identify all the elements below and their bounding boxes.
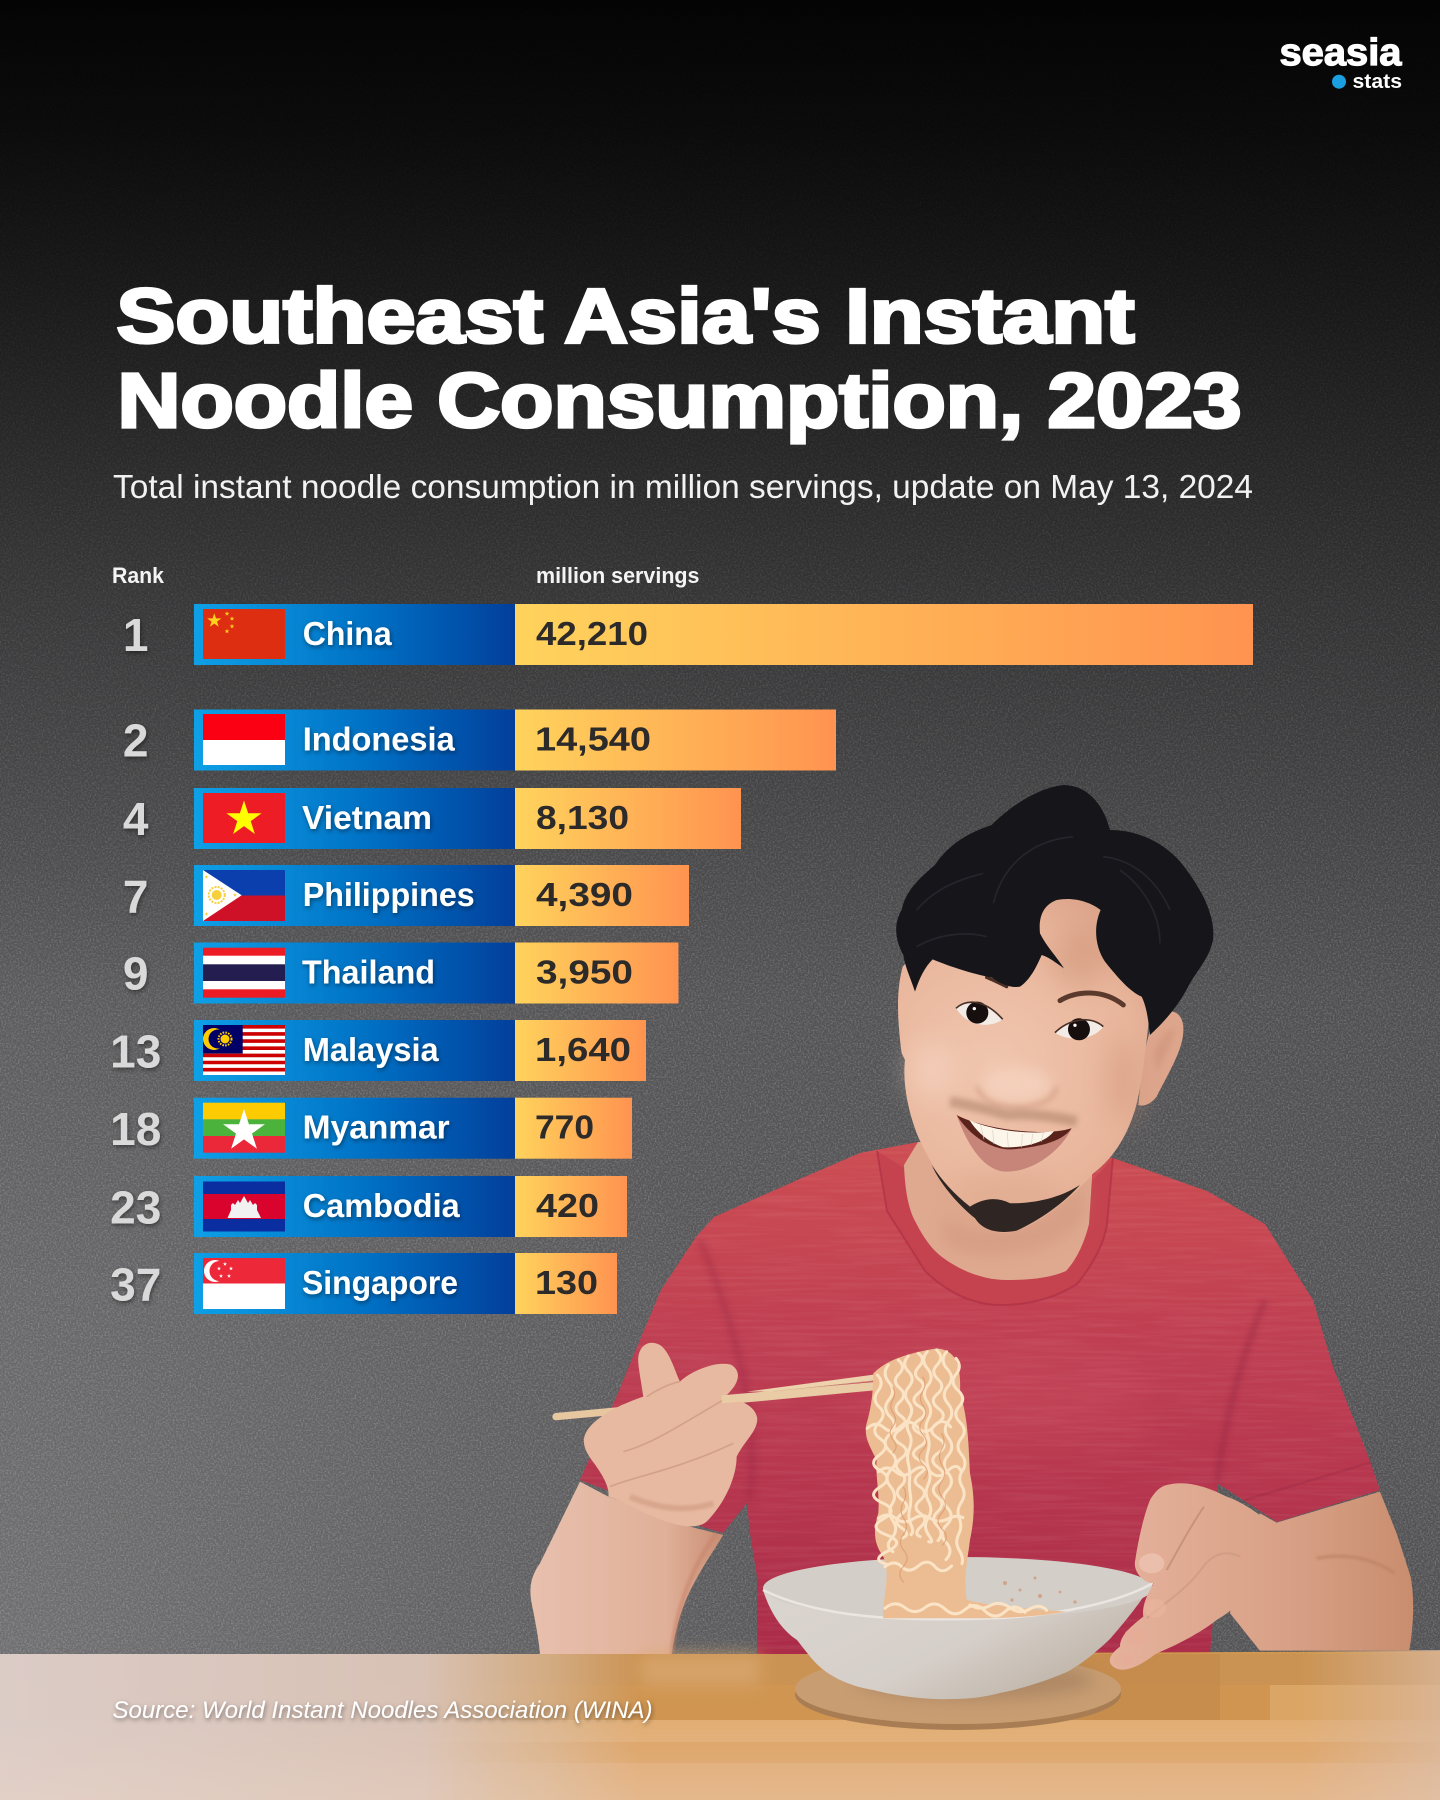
source note: Source: World Instant Noodles Association (WINA) (112, 1697, 652, 1724)
cork coaster (795, 1654, 1121, 1730)
hair highlights (917, 837, 1170, 947)
arm (1230, 1492, 1413, 1651)
bowl inside (763, 1557, 1153, 1619)
bar row: Singapore, rank 37, 130: 37 (110, 1258, 161, 1310)
flag: Malaysia (203, 1025, 285, 1075)
his right arm and hand holding chopsticks (530, 1343, 878, 1654)
hand (1110, 1483, 1300, 1670)
bar row: Singapore, rank 37, 130: 130 (535, 1264, 598, 1301)
logo: seasia stats: seasia (1280, 32, 1402, 74)
flag: Indonesia (203, 714, 285, 765)
bar row: Philippines, rank 7, 4,390: Philippines (303, 876, 475, 913)
bar row: Myanmar, rank 18, 770: 770 (535, 1109, 594, 1146)
bar row: Singapore, rank 37, 130: Singapore (302, 1264, 458, 1301)
photo: man eating noodles (530, 785, 1390, 1660)
bar row: Vietnam, rank 4, 8,130 (123, 788, 741, 849)
table (0, 1650, 1440, 1800)
bar row: Malaysia, rank 13, 1,640: 13 (110, 1026, 161, 1078)
mouth (957, 1115, 1072, 1172)
chopsticks (722, 1386, 875, 1399)
bar row: Philippines, rank 7, 4,390: 7 (123, 870, 148, 922)
bar row: Thailand, rank 9, 3,950 (123, 942, 678, 1004)
bar row: Thailand, rank 9, 3,950: 9 (123, 948, 148, 1000)
bar row: Indonesia, rank 2, 14,540: Indonesia (303, 720, 455, 758)
bar row: Cambodia, rank 23, 420: Cambodia (303, 1187, 460, 1224)
flag: Myanmar (203, 1103, 285, 1153)
bowl body (763, 1583, 1153, 1699)
teeth gaps (981, 1125, 1043, 1147)
bar row: Malaysia, rank 13, 1,640: Malaysia (303, 1031, 439, 1068)
eyes (956, 1002, 1003, 1025)
noodles lifted by chopsticks (866, 1348, 1067, 1618)
bar row: Myanmar, rank 18, 770: 18 (110, 1103, 161, 1155)
bar row: Cambodia, rank 23, 420 (110, 1176, 627, 1237)
head (896, 785, 1213, 1233)
upper arm and forearm (530, 1482, 723, 1654)
bar row: China, rank 1, 42,210 (123, 604, 1253, 665)
bar row: China, rank 1, 42,210: 1 (123, 609, 148, 661)
right ear (1138, 1011, 1183, 1106)
flag: Singapore (203, 1258, 285, 1309)
flag: Philippines (203, 870, 285, 921)
flag: Cambodia (203, 1182, 285, 1232)
bar row: Thailand, rank 9, 3,950: 3,950 (536, 954, 633, 990)
bar row: Thailand, rank 9, 3,950: Thailand (302, 954, 435, 990)
eyebrows (1060, 993, 1123, 1005)
bar row: Vietnam, rank 4, 8,130: 8,130 (536, 799, 629, 836)
column header: million servings: million servings (536, 563, 700, 588)
bar row: Vietnam, rank 4, 8,130: 4 (123, 793, 149, 845)
speckles of sauce (1003, 1576, 1077, 1604)
bar row: Philippines, rank 7, 4,390: 4,390 (536, 876, 633, 913)
shirt folds (1217, 1300, 1265, 1483)
cheek highlights (908, 1040, 955, 1100)
title: Noodle Consumption, 2023 (118, 358, 1242, 444)
bar row: Indonesia, rank 2, 14,540: 14,540 (535, 720, 651, 758)
moustache (950, 1102, 1077, 1122)
subtitle: Total instant noodle consumption in million servings, update on May 13, 2024 (113, 468, 1253, 505)
hair (896, 785, 1213, 1035)
nose shadow (977, 1087, 1057, 1107)
logo: seasia stats: stats (1352, 71, 1402, 93)
title (116, 274, 1242, 444)
title: Southeast Asia's Instant (116, 274, 1134, 360)
goatee (932, 1165, 1080, 1232)
bar row: Myanmar, rank 18, 770: Myanmar (303, 1109, 450, 1146)
face (898, 887, 1153, 1233)
bar row: Singapore, rank 37, 130 (110, 1253, 617, 1314)
hand (584, 1343, 757, 1526)
shirt (580, 1142, 1380, 1654)
bar row: Myanmar, rank 18, 770 (110, 1098, 632, 1159)
collar (877, 1151, 1113, 1305)
flag: China (203, 609, 285, 659)
bar row: Cambodia, rank 23, 420: 23 (110, 1182, 161, 1234)
logo: seasia stats (1280, 32, 1402, 93)
bar row: Malaysia, rank 13, 1,640: 1,640 (535, 1031, 631, 1068)
flag: Vietnam (203, 793, 285, 843)
flag: Thailand (203, 948, 285, 998)
bowl of noodles (763, 1557, 1153, 1699)
bar row: Indonesia, rank 2, 14,540: 2 (123, 714, 148, 766)
bar row: Vietnam, rank 4, 8,130: Vietnam (302, 799, 432, 836)
bar row: Indonesia, rank 2, 14,540 (123, 710, 836, 770)
bar row: Philippines, rank 7, 4,390 (123, 865, 689, 926)
bar row: China, rank 1, 42,210: 42,210 (536, 615, 648, 652)
column header: Rank: Rank (112, 563, 165, 588)
neck (904, 1140, 1092, 1280)
bar row: Malaysia, rank 13, 1,640 (110, 1020, 646, 1081)
back chopstick end (556, 1387, 875, 1417)
shirt heather texture (570, 1140, 1390, 1660)
bar row: China, rank 1, 42,210: China (303, 615, 392, 652)
his left arm and hand holding the bowl (1110, 1483, 1413, 1670)
bar row: Cambodia, rank 23, 420: 420 (536, 1187, 599, 1224)
